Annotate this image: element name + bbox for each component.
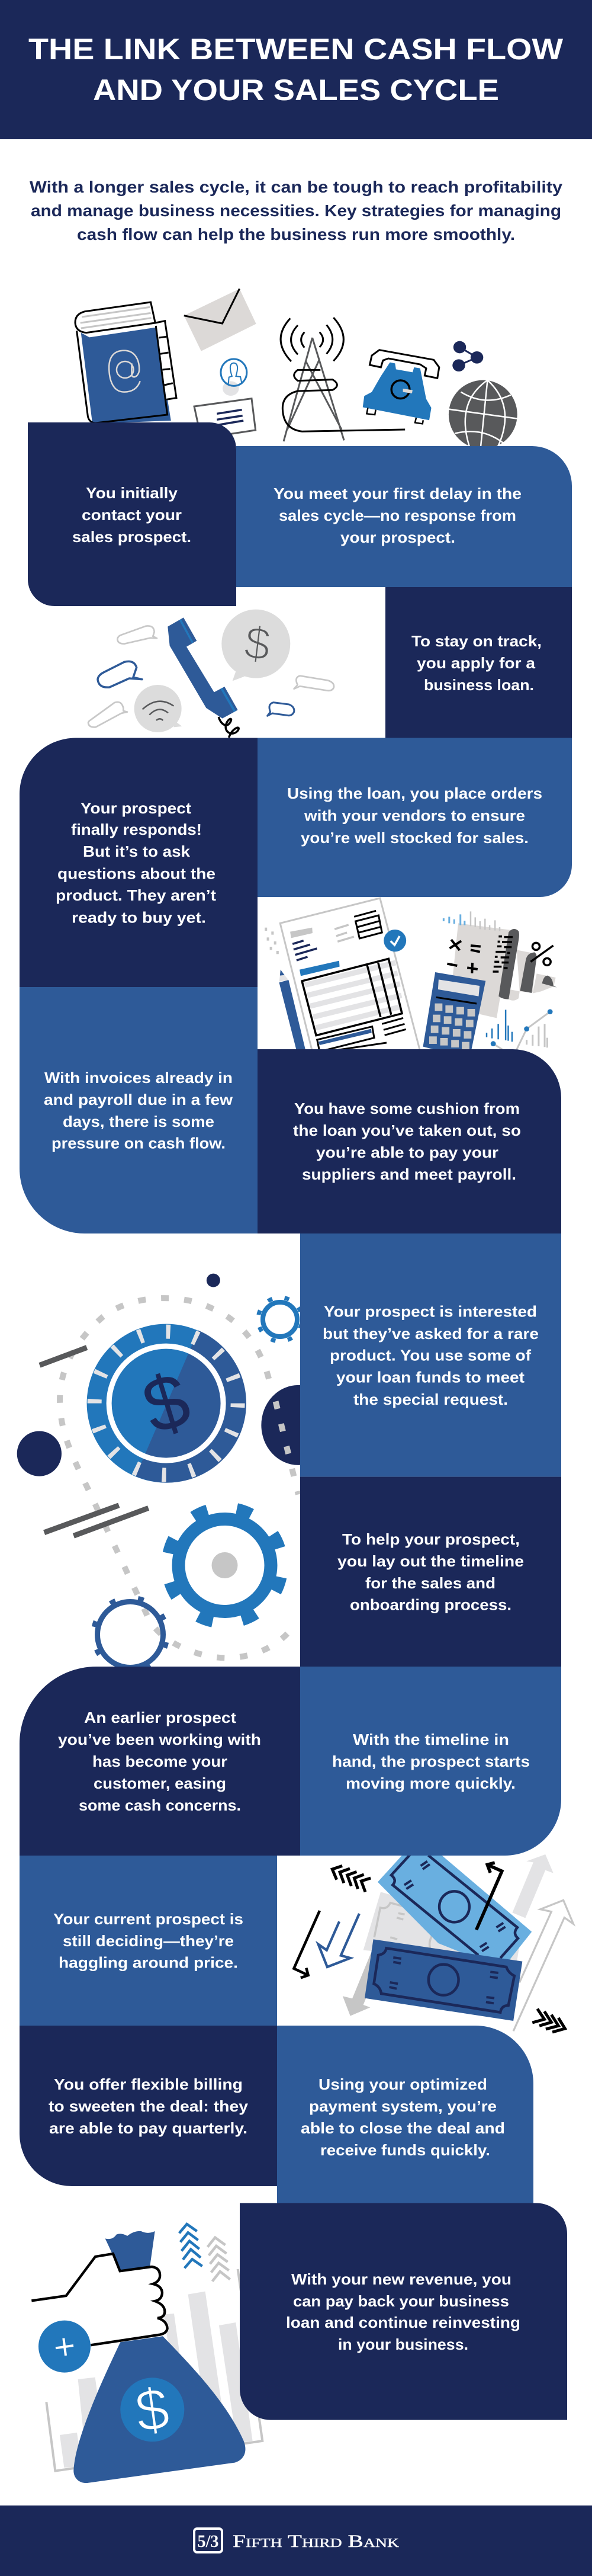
panel: initial contact: sales prospect. — [72, 528, 191, 546]
panel: rare product: your loan funds to meet — [336, 1369, 525, 1386]
chevrons — [332, 1866, 565, 2032]
intro text — [30, 178, 563, 243]
panel: rare product: Your prospect is interested — [324, 1302, 537, 1320]
panel: first delay: sales cycle—no response from — [279, 507, 516, 524]
intro text: cash flow can help the business run more smoothly. — [77, 225, 515, 243]
icon: calculator — [423, 972, 485, 1059]
icon: globe — [449, 380, 517, 449]
illustration: coin and gears — [17, 1274, 335, 1679]
panel: optimized payment: able to close the deal and — [301, 2119, 505, 2137]
icon: wifi speech bubble — [134, 685, 182, 732]
panel: place orders: Using the loan, you place orders — [287, 784, 542, 802]
icon: bank logo: 5/3 — [198, 2532, 219, 2551]
panel: loan cushion: the loan you’ve taken out, so — [293, 1122, 521, 1139]
panel: flexible billing — [20, 2026, 277, 2186]
arrows: black and blue — [294, 1863, 502, 1978]
panel: first delay — [236, 446, 572, 587]
navy dots — [17, 1274, 335, 1476]
panel: prospect responds: product. They aren’t — [56, 886, 216, 904]
panel: loan cushion — [258, 1049, 561, 1233]
panel: cash flow pressure: With invoices already in — [44, 1069, 233, 1087]
icon: dollar coin: $ — [133, 1356, 200, 1450]
dashed orbit path — [17, 1274, 335, 1658]
panel: prospect responds: But it’s to ask — [83, 842, 191, 860]
illustration: contact tools — [75, 289, 517, 449]
icon: light blue banknote — [378, 1848, 532, 1969]
panel: initial contact: You initially — [86, 484, 178, 502]
icon: small gear — [254, 1293, 306, 1345]
panel: business loan: business loan. — [424, 676, 534, 694]
panel: new revenue: loan and continue reinvesting — [286, 2314, 520, 2331]
icon: dollar coin — [87, 1324, 246, 1483]
panel: new revenue: With your new revenue, you — [291, 2270, 511, 2288]
icon: envelope — [184, 289, 256, 351]
panel: timeline: To help your prospect, — [342, 1530, 520, 1548]
arrow: gray down — [343, 1952, 372, 2016]
icon: bank logo — [193, 2527, 223, 2553]
icon: dollar speech bubble — [221, 610, 290, 681]
panel: rare product: product. You use some of — [330, 1346, 531, 1364]
panel: haggling: haggling around price. — [59, 1954, 238, 1972]
icon: dollar on bag: $ — [131, 2375, 173, 2445]
illustration: money bag — [31, 2224, 262, 2483]
panel: timeline in hand: moving more quickly. — [346, 1774, 516, 1792]
panel: earlier prospect: An earlier prospect — [84, 1709, 236, 1726]
icon: radio tower — [281, 318, 405, 441]
panel: timeline in hand: hand, the prospect starts — [332, 1752, 530, 1770]
intro text: and manage business necessities. Key strategies for managing — [31, 201, 561, 220]
panel: prospect responds — [20, 738, 258, 987]
icon: plus circle — [38, 2321, 91, 2373]
icon: address book — [75, 302, 176, 424]
panel: optimized payment: payment system, you’re — [309, 2097, 497, 2115]
arrows: pale and outline up — [512, 1854, 574, 2031]
icon: bag — [73, 2231, 245, 2483]
footer bar with logo — [0, 2505, 592, 2576]
panel: earlier prospect: you’ve been working with — [58, 1731, 261, 1748]
panel: place orders — [258, 738, 572, 897]
icon: telephone handset — [168, 617, 239, 738]
panel: flexible billing: to sweeten the deal: they — [49, 2097, 249, 2115]
panel: timeline: for the sales and — [365, 1574, 496, 1592]
panel: timeline in hand: With the timeline in — [353, 1731, 509, 1748]
panel: earlier prospect: has become your — [92, 1752, 227, 1770]
panel: earlier prospect: customer, easing — [94, 1774, 226, 1792]
panel: prospect responds: ready to buy yet. — [72, 909, 206, 927]
panel: loan cushion: You have some cushion from — [294, 1100, 520, 1117]
panel: loan cushion: you’re able to pay your — [316, 1143, 498, 1161]
panel: cash flow pressure — [20, 987, 258, 1233]
panel: haggling: still deciding—they’re — [63, 1932, 234, 1950]
panel: timeline — [300, 1477, 561, 1667]
panel: place orders: you’re well stocked for sales. — [301, 829, 529, 847]
panel: prospect responds: Your prospect — [81, 799, 191, 817]
icon: dollar sign in bubble: $ — [242, 616, 274, 671]
panel: timeline: you lay out the timeline — [337, 1552, 524, 1570]
panel: timeline: onboarding process. — [350, 1596, 511, 1614]
panel: rare product: the special request. — [353, 1390, 508, 1408]
icon: document — [194, 399, 256, 438]
intro text: With a longer sales cycle, it can be tough to reach profitability — [30, 178, 563, 196]
panel: optimized payment: Using your optimized — [318, 2075, 487, 2093]
panel: earlier prospect: some cash concerns. — [79, 1796, 241, 1814]
panel: new revenue: can pay back your business — [293, 2292, 509, 2310]
panel: business loan: To stay on track, — [411, 632, 542, 650]
icon: small speech bubbles — [88, 626, 334, 727]
icon: hand — [31, 2254, 168, 2345]
panel: rare product — [300, 1233, 561, 1477]
bank name: Fifth Third Bank — [233, 2532, 399, 2551]
header banner with title: THE LINK BETWEEN CASH FLOW — [28, 33, 564, 66]
panel: new revenue: in your business. — [338, 2335, 468, 2353]
panel: optimized payment — [277, 2026, 533, 2203]
panel: timeline in hand — [300, 1667, 561, 1856]
icon: small charts — [487, 1009, 553, 1052]
panel: business loan — [385, 587, 572, 738]
panel: first delay: You meet your first delay in the — [274, 485, 522, 502]
bar chart background — [46, 2269, 262, 2471]
panel: cash flow pressure: and payroll due in a few — [44, 1091, 233, 1108]
panel: business loan: you apply for a — [417, 654, 536, 672]
panel: cash flow pressure: pressure on cash flow. — [52, 1134, 226, 1152]
icon: dark blue banknote — [365, 1939, 522, 2021]
panel: initial contact: contact your — [82, 506, 182, 524]
panel: flexible billing: are able to pay quarterly. — [49, 2119, 247, 2137]
illustration: banknotes and arrows — [294, 1848, 574, 2032]
panel: haggling: Your current prospect is — [53, 1910, 243, 1928]
panel: rare product: but they’ve asked for a rare — [323, 1325, 539, 1343]
icon: receipt roll — [443, 911, 556, 1018]
illustration: phone and speech bubbles — [88, 610, 334, 738]
header banner with title — [0, 0, 592, 139]
illustration: invoice and calculator — [265, 898, 556, 1065]
header banner with title: AND YOUR SALES CYCLE — [93, 73, 499, 107]
icon: large gear — [156, 1497, 293, 1633]
icon: invoice — [280, 898, 424, 1065]
panel: loan cushion: suppliers and meet payroll. — [302, 1165, 516, 1183]
panel: new revenue — [240, 2203, 567, 2420]
dark gray dashes — [40, 1347, 149, 1536]
icon: share nodes — [452, 341, 483, 371]
panel: initial contact — [28, 422, 236, 606]
icon: rotary telephone — [363, 350, 439, 424]
panel: prospect responds: questions about the — [57, 865, 215, 883]
panel: earlier prospect — [20, 1667, 300, 1856]
chevrons up — [179, 2224, 230, 2282]
panel: first delay: your prospect. — [340, 528, 455, 546]
panel: flexible billing: You offer flexible billing — [54, 2075, 243, 2093]
panel: place orders: with your vendors to ensure — [304, 807, 525, 825]
panel: cash flow pressure: days, there is some — [63, 1113, 214, 1130]
panel: haggling — [20, 1856, 277, 2026]
icon: pencil — [265, 928, 308, 1059]
icon: person badge — [221, 359, 247, 396]
icon: gray banknote — [363, 1892, 522, 1965]
panel: optimized payment: receive funds quickly. — [320, 2141, 490, 2159]
icon: outline gear — [86, 1590, 175, 1679]
panel: prospect responds: finally responds! — [71, 821, 202, 838]
